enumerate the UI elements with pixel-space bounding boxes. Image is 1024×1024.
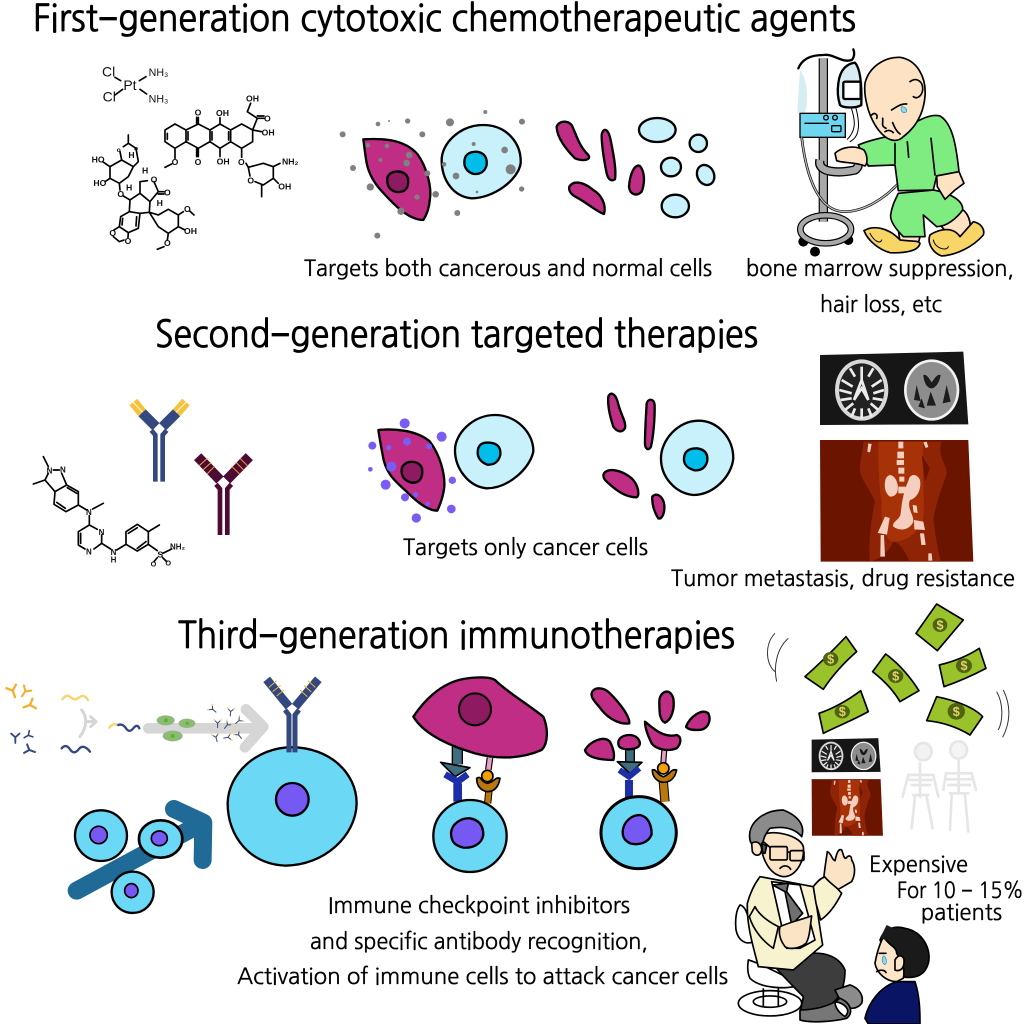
icon: pazopanib structure: N — [86, 547, 92, 556]
icon: etoposide-like structure: O — [125, 236, 132, 246]
icon: doxorubicin: O — [238, 157, 245, 167]
panel: small scans in cost scene — [812, 738, 883, 836]
icon: pazopanib structure: N — [86, 508, 92, 517]
skeleton one — [903, 743, 938, 828]
caption: side effects line two: hair loss, etc — [820, 294, 942, 316]
drug particles — [340, 110, 525, 239]
panel: targeted drug structures — [33, 402, 249, 569]
skeleton two — [943, 741, 976, 832]
icon: cisplatin: NH₃ — [149, 94, 168, 106]
money coins: $ — [827, 652, 834, 666]
normal cell — [455, 415, 533, 488]
destroyed cancer fragments — [585, 688, 710, 760]
icon: doxorubicin: OH — [246, 94, 259, 104]
icon: doxorubicin: NH₂ — [282, 157, 298, 167]
icon: pazopanib structure — [33, 457, 186, 569]
money coins — [823, 618, 972, 720]
money coins: $ — [839, 705, 846, 719]
IV pole — [797, 49, 912, 257]
cancer cell — [378, 429, 444, 511]
icon: cisplatin: Cl — [103, 89, 116, 105]
yellow and blue gene strands — [62, 696, 139, 752]
cancer cell fragments — [603, 394, 664, 519]
cancer cell — [363, 139, 430, 220]
icon: etoposide-like structure: H — [126, 183, 132, 193]
producer cells — [157, 715, 195, 741]
icon: pazopanib structure: N — [111, 548, 117, 557]
small T cell two — [139, 820, 182, 858]
small yellow antibodies — [6, 685, 36, 712]
child patient — [865, 925, 929, 1024]
icon: etoposide-like structure: OH — [184, 226, 197, 236]
icon: etoposide-like structure: HO — [93, 178, 107, 188]
icon: etoposide-like structure: H — [128, 150, 135, 160]
antibody on T cell — [267, 679, 318, 752]
icon: pazopanib structure: S — [157, 550, 163, 560]
money coins: $ — [892, 669, 899, 683]
icon: pazopanib structure: N — [60, 465, 66, 474]
icon: etoposide-like structure: O — [164, 188, 171, 198]
icon: doxorubicin: O — [195, 107, 202, 117]
title: second generation: Second−generation targeted therapies — [155, 316, 758, 353]
caption: immune checkpoint line two: and specific antibody recognition, — [310, 931, 648, 953]
icon: doxorubicin: O — [247, 175, 254, 185]
icon: maroon antibody — [198, 457, 249, 535]
small blue antibodies — [11, 731, 37, 756]
motion lines — [767, 633, 1009, 737]
caption: immune checkpoint line three: Activation of immune cells to attack cancer cells — [237, 966, 728, 988]
caption: metastasis: Tumor metastasis, drug resistance — [671, 568, 1015, 590]
targeted drug particles — [368, 418, 456, 523]
panel: immune checkpoint — [413, 677, 710, 872]
immune cell — [433, 800, 507, 872]
small T cell three — [112, 872, 154, 913]
icon: etoposide-like structure: HO — [92, 155, 105, 165]
icon: etoposide-like structure: O — [151, 175, 158, 185]
chair — [736, 905, 802, 1016]
icon: etoposide-like structure: O — [184, 204, 191, 214]
money coins: $ — [953, 705, 960, 719]
icon: etoposide-like structure: H — [157, 198, 163, 208]
icon: etoposide-like structure: O — [164, 238, 171, 248]
patient figure — [835, 57, 984, 256]
panel: first-generation chemical structures — [92, 64, 298, 249]
panel: sick patient with IV pole — [797, 49, 984, 257]
destroyed normal cell fragments — [639, 118, 718, 217]
icon: doxorubicin: O — [172, 157, 179, 167]
icon: pazopanib structure: N — [47, 466, 53, 475]
destroyed cancer cell fragments — [557, 122, 644, 214]
icon: pazopanib structure: O — [165, 559, 171, 568]
panel: chemotherapy acts on both cells — [340, 110, 718, 239]
icon: doxorubicin — [165, 94, 298, 197]
panel: cost, doctor and patient — [736, 604, 1009, 1024]
icon: cisplatin: Pt — [123, 77, 137, 93]
caption: side effects line one: bone marrow suppression, — [746, 258, 1014, 280]
doctor figure — [747, 810, 862, 1022]
icon: pazopanib structure: NH₂ — [170, 543, 186, 552]
icon: etoposide-like structure: O — [117, 189, 124, 199]
icon: pazopanib structure: O — [151, 560, 157, 569]
caption: patients: patients — [921, 902, 1002, 924]
icon: doxorubicin: O — [264, 113, 271, 123]
icon: cisplatin: NH₃ — [149, 67, 168, 79]
arrow: production — [148, 709, 263, 747]
small T cell one — [75, 810, 127, 861]
icon: etoposide-like structure: o — [134, 146, 138, 153]
caption: targets only cancer: Targets only cancer cells — [403, 537, 648, 559]
icon: pazopanib structure: H — [111, 555, 117, 564]
icon: etoposide-like structure: O — [109, 228, 116, 238]
title: third generation: Third−generation immunotherapies — [178, 617, 735, 654]
falling money bills — [805, 604, 986, 735]
checkpoint engagement — [441, 747, 500, 803]
icon: etoposide-like structure — [92, 135, 197, 249]
panel: antibody production and immune cell activation — [6, 679, 357, 913]
money coins: $ — [936, 618, 944, 632]
icon: doxorubicin: OH — [278, 181, 291, 191]
cancer cell — [413, 677, 547, 757]
checkpoint blockade — [617, 749, 677, 802]
icon: blue antibody — [133, 402, 187, 482]
caption: expensive: Expensive — [869, 854, 968, 876]
icon: doxorubicin: OH — [217, 157, 230, 167]
icon: cisplatin — [102, 64, 168, 106]
arrow: strand merge — [80, 710, 96, 737]
icon: etoposide-like structure: o — [117, 147, 121, 154]
produced antibodies — [207, 704, 244, 742]
arrow: immune activation — [77, 809, 203, 891]
surviving normal cell — [661, 421, 733, 495]
normal cell — [442, 125, 521, 198]
money coins: $ — [960, 659, 967, 673]
icon: cisplatin: Cl — [102, 64, 115, 80]
panel: targeted therapy acts on cancer only — [368, 394, 733, 523]
caption: immune checkpoint line one: Immune checkpoint inhibitors — [328, 895, 630, 917]
large T cell — [228, 747, 357, 866]
icon: pazopanib structure: N — [99, 528, 105, 537]
title: first generation: First−generation cytotoxic chemotherapeutic agents — [33, 0, 856, 37]
icon: doxorubicin: OH — [262, 127, 275, 137]
icon: doxorubicin: O — [195, 157, 202, 167]
panel: brain CT and PET scans — [820, 352, 973, 562]
caption: targets both: Targets both cancerous and normal cells — [304, 258, 712, 280]
icon: doxorubicin: OH — [216, 108, 229, 118]
icon: etoposide-like structure: H — [142, 165, 148, 175]
immune cell — [601, 797, 676, 869]
